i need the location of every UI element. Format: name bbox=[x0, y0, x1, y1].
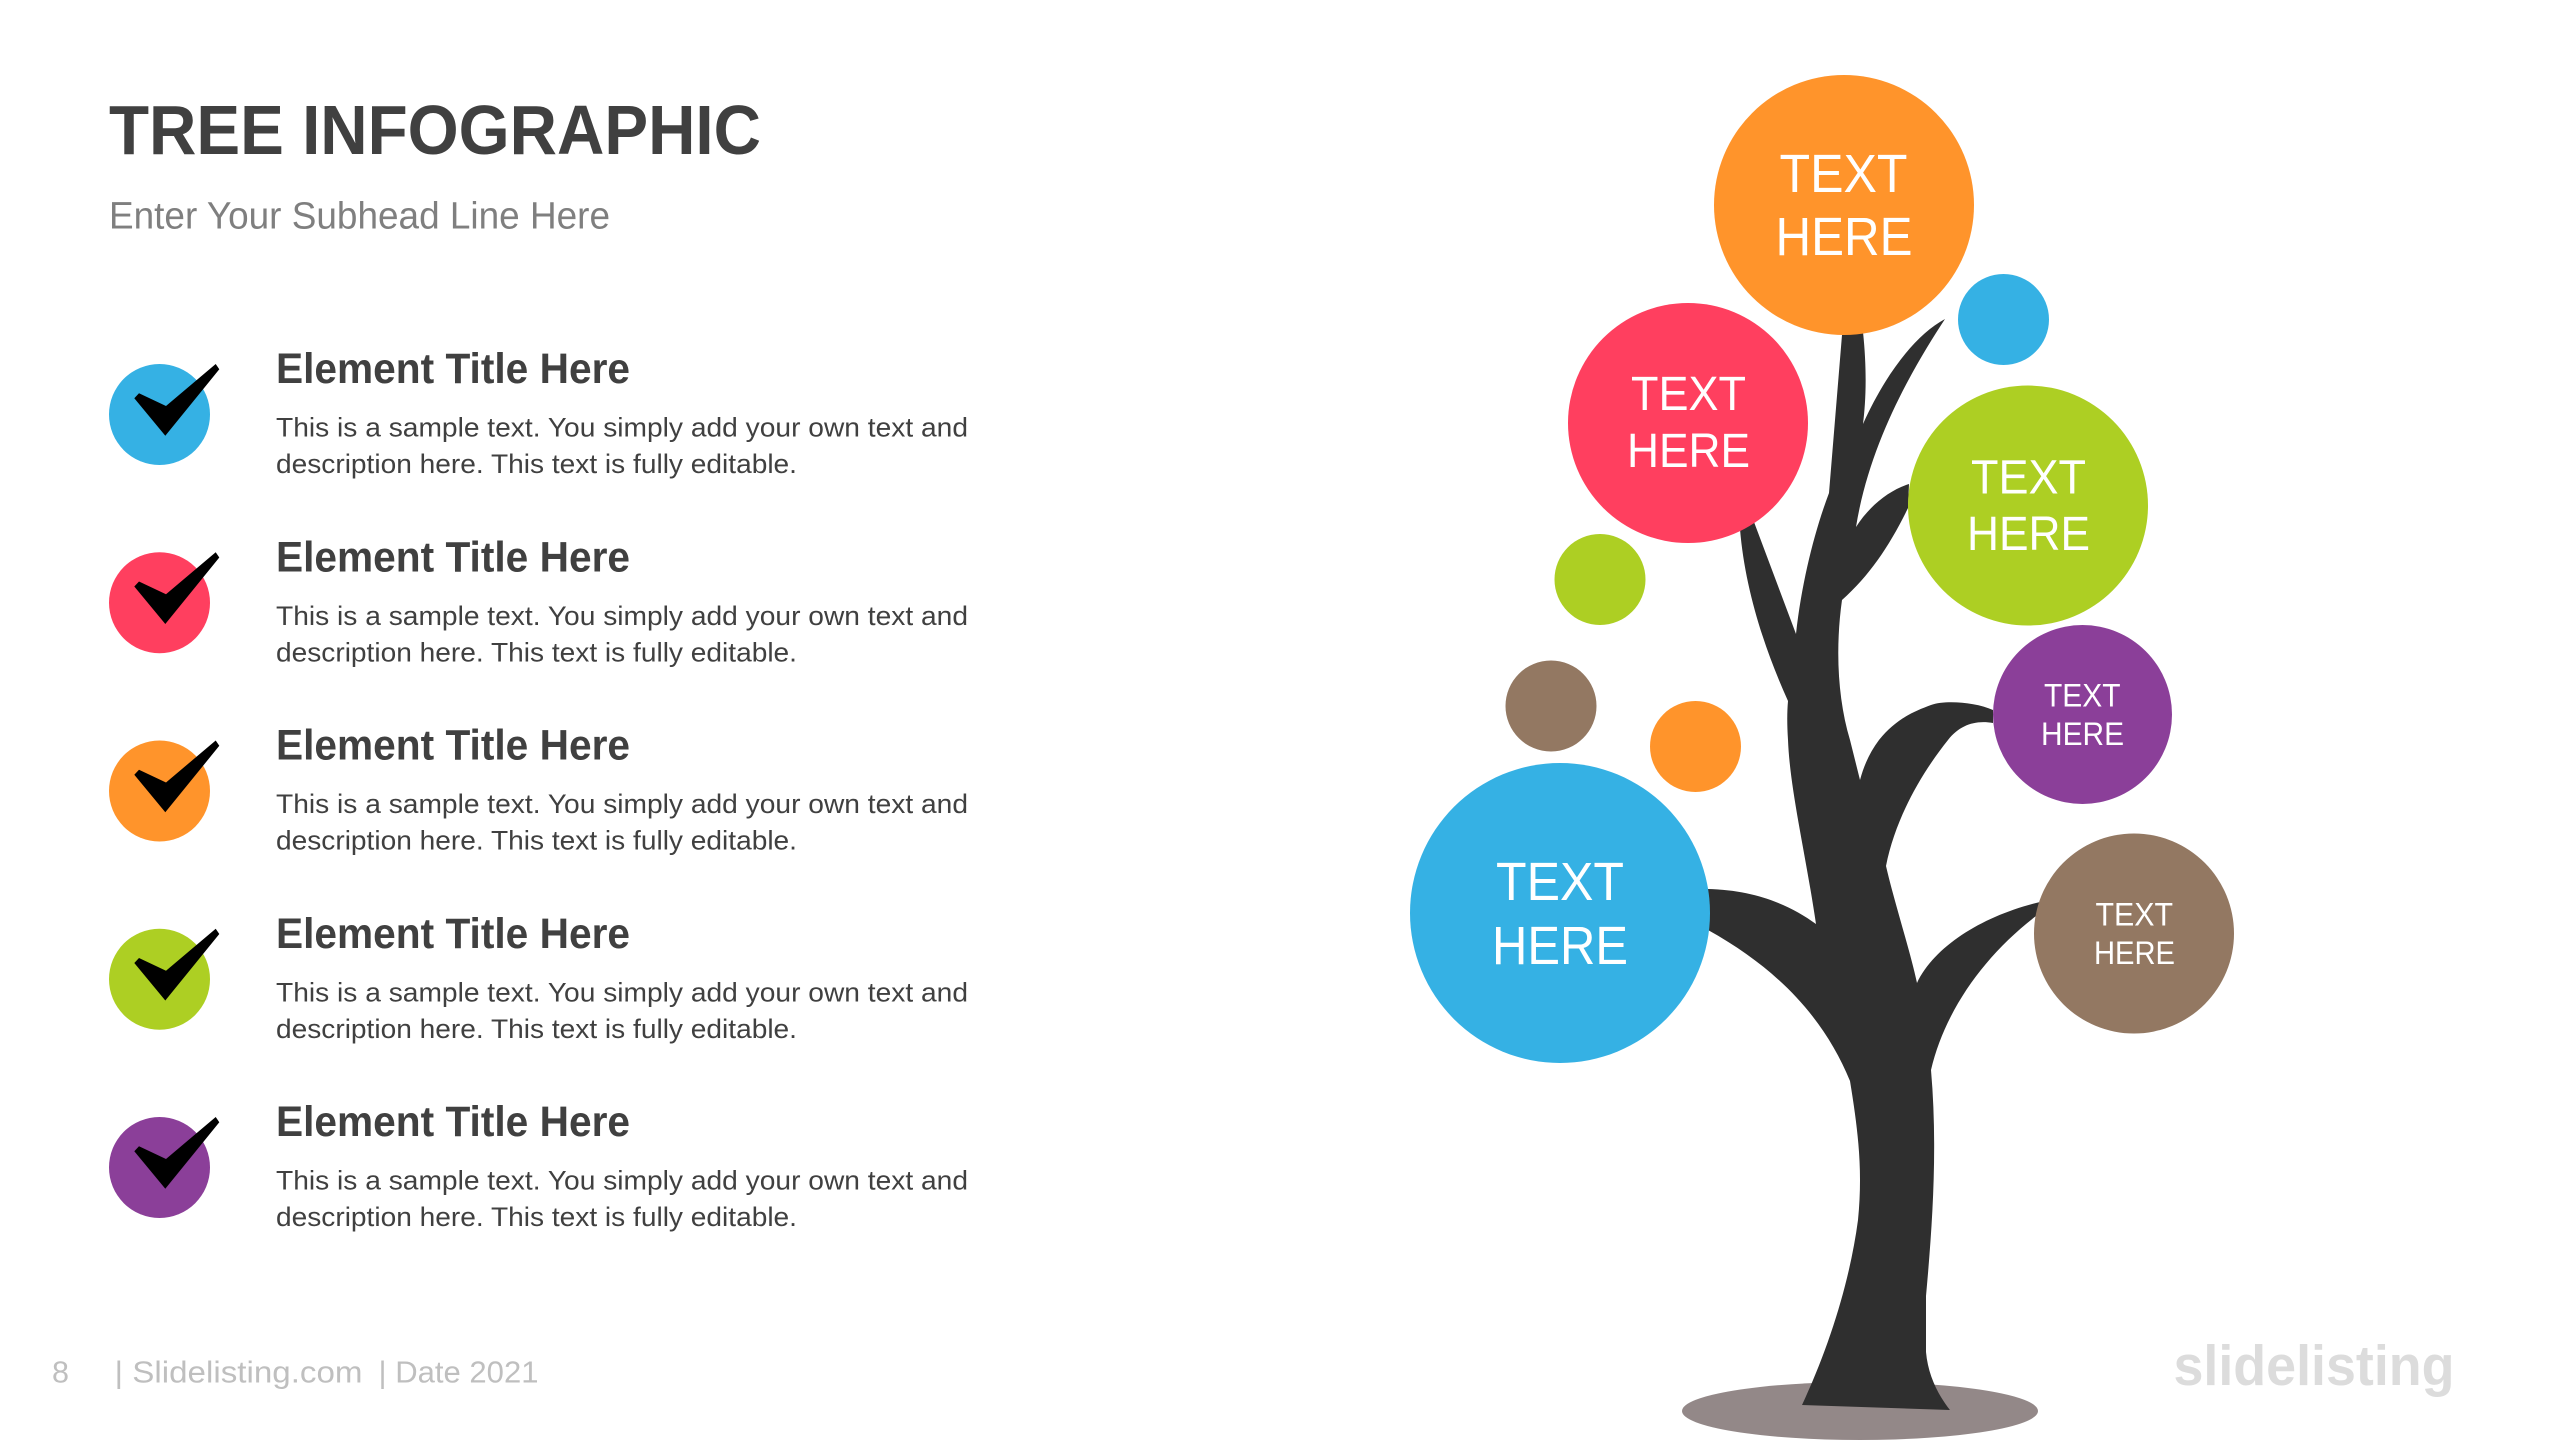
icon: green check circle bbox=[109, 929, 219, 1030]
icon: blue check circle bbox=[109, 364, 219, 465]
footer: | Slidelisting.com bbox=[114, 1354, 362, 1390]
item description: This is a sample text. You simply add your own text and bbox=[276, 412, 968, 442]
small dot: blue bbox=[1958, 274, 2049, 365]
bubble: purple: TEXT bbox=[2044, 678, 2120, 714]
bubble: brown: HERE bbox=[2094, 935, 2175, 971]
small dot: green bbox=[1554, 534, 1646, 625]
item description: description here. This text is fully editable. bbox=[276, 1014, 797, 1044]
item title: Element Title Here bbox=[276, 533, 630, 581]
item description: This is a sample text. You simply add your own text and bbox=[276, 1166, 968, 1196]
item title: Element Title Here bbox=[276, 1098, 630, 1146]
bubble: orange top: HERE bbox=[1776, 207, 1912, 267]
bubble: brown: TEXT bbox=[2096, 896, 2173, 932]
bubble: brown bbox=[2034, 834, 2234, 1034]
tree bbox=[1708, 319, 2040, 1410]
item description: This is a sample text. You simply add your own text and bbox=[276, 601, 968, 631]
item description bbox=[276, 601, 968, 667]
bubble: blue large: HERE bbox=[1492, 916, 1628, 976]
item description: description here. This text is fully editable. bbox=[276, 449, 797, 479]
icon: purple check circle bbox=[109, 1117, 219, 1218]
item description bbox=[276, 789, 968, 856]
icon: orange check circle bbox=[109, 740, 219, 842]
bubble: red: HERE bbox=[1627, 425, 1750, 478]
item description: This is a sample text. You simply add your own text and bbox=[276, 977, 968, 1007]
list item 5 bbox=[109, 1098, 968, 1232]
list item 1 bbox=[109, 345, 968, 479]
list item 4 bbox=[109, 910, 968, 1044]
bubble: purple: HERE bbox=[2041, 716, 2124, 752]
bubble: orange top bbox=[1714, 75, 1974, 335]
item title: Element Title Here bbox=[276, 910, 630, 958]
bubble: red bbox=[1568, 303, 1808, 543]
list item 2 bbox=[109, 533, 968, 667]
item description bbox=[276, 977, 968, 1044]
footer: 8 bbox=[52, 1354, 69, 1390]
item description: description here. This text is fully editable. bbox=[276, 826, 797, 856]
footer: | Date 2021 bbox=[378, 1354, 538, 1390]
bubble: blue large bbox=[1410, 763, 1710, 1063]
item title: Element Title Here bbox=[276, 345, 630, 393]
title: TREE INFOGRAPHIC bbox=[109, 91, 761, 169]
item description: description here. This text is fully editable. bbox=[276, 1202, 797, 1232]
list item 3 bbox=[109, 722, 968, 856]
subtitle: Enter Your Subhead Line Here bbox=[109, 196, 610, 238]
bubble: blue large: TEXT bbox=[1496, 852, 1624, 912]
bubble: purple bbox=[1993, 625, 2172, 804]
ground shadow bbox=[1682, 1382, 2038, 1440]
item description bbox=[276, 412, 968, 479]
logo wordmark: slidelisting bbox=[2174, 1334, 2454, 1398]
bubble: red: TEXT bbox=[1631, 368, 1746, 421]
footer bbox=[52, 1354, 538, 1390]
bubble: green: TEXT bbox=[1971, 452, 2086, 504]
small dot: orange bbox=[1650, 701, 1741, 792]
bubble: green: HERE bbox=[1967, 508, 2090, 561]
item description: This is a sample text. You simply add your own text and bbox=[276, 789, 968, 819]
item title: Element Title Here bbox=[276, 722, 630, 770]
item description: description here. This text is fully editable. bbox=[276, 637, 797, 667]
bubble: orange top: TEXT bbox=[1780, 144, 1908, 204]
bubble: green bbox=[1908, 386, 2148, 626]
icon: red check circle bbox=[109, 552, 219, 653]
item description bbox=[276, 1166, 968, 1232]
small dot: brown bbox=[1506, 660, 1596, 752]
